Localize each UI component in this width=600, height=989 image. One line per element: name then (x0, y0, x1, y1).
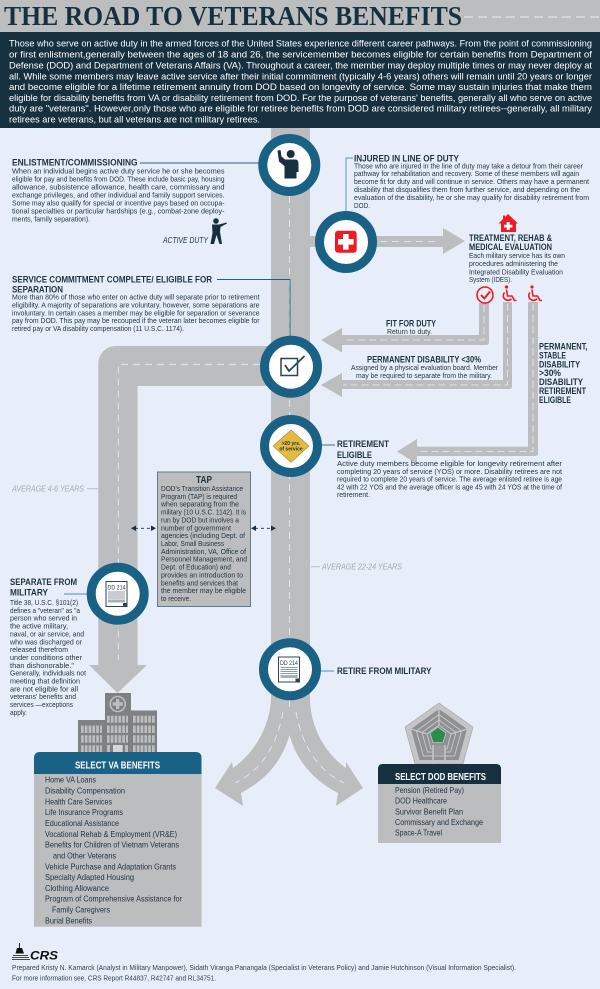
panel: select DOD benefits: Commissary and Exchange (395, 818, 483, 827)
icon: Pentagon building (405, 703, 473, 764)
label: permanent disability under 30 percent: Assigned by a physical evaluation board. Member (351, 363, 498, 372)
text block: treatment and evaluation: procedures administering the (469, 259, 558, 268)
label: permanent stable disability: ELIGIBLE (539, 395, 571, 406)
panel: TAP: Program (TAP) is required (161, 492, 237, 501)
text block: enlistment: tional specialties or particular hardships (e.g., combat-zone deploy- (12, 206, 225, 216)
text block: injured in line of duty: evaluation of the disability, he or she may qualify for disability retirement from (354, 193, 589, 202)
text block: enlistment: Some may also qualify for special or incentive pays based on occupa- (12, 198, 225, 208)
panel: TAP (158, 472, 250, 606)
text block: separate from military: naval, or air service, and (10, 629, 84, 638)
panel: select VA benefits: SELECT VA BENEFITS (75, 760, 160, 772)
panel: select VA benefits: Benefits for Children of Vietnam Veterans (45, 841, 179, 850)
panel: TAP: agencies (including Dept. of (161, 531, 246, 540)
text block: injured in line of duty: Those who are injured in the line of duty may take a detour from their career (354, 162, 583, 170)
text block: service commitment: eligibility. A majority of separations are voluntary, however, some separations are (12, 300, 260, 309)
panel: select VA benefits: Program of Comprehensive Assistance for (45, 895, 182, 904)
text block: treatment and evaluation: TREATMENT, REHAB & (469, 233, 552, 244)
footer credits (12, 963, 516, 983)
label: permanent stable disability (539, 342, 588, 406)
text block: enlistment (12, 158, 225, 224)
label: retire from military: RETIRE FROM MILITARY (337, 666, 432, 677)
panel: TAP: Administration, VA, Office of (161, 547, 247, 556)
icon: capitol dome (12, 943, 30, 960)
milestone: injury cross icon (320, 216, 372, 268)
text block: injured in line of duty: pathway for rehabilitation and recovery. Some of these members will again (354, 169, 579, 178)
text block: separate from military: SEPARATE FROM (10, 577, 77, 588)
panel: TAP: the member may be eligible (161, 586, 246, 595)
label: permanent disability under 30 percent (351, 355, 498, 380)
title: THE ROAD TO VETERANS BENEFITS (4, 1, 462, 31)
text block: injured in line of duty: DOD. (354, 201, 370, 210)
text block: enlistment: ENLISTMENT/COMMISSIONING (12, 158, 138, 169)
icon: yellow road sign: >20 yrs. (282, 441, 301, 447)
panel: select VA benefits: Burial Benefits (45, 916, 92, 925)
panel: TAP: Dept. of Education) and (161, 563, 231, 572)
intro text panel: eligible for disability benefits from VA or disability retirement from DOD. For the purpose of veterans' benefits, generally all who serve on active (9, 93, 592, 104)
text block: enlistment: When an individual begins active duty service he or she becomes (12, 166, 225, 176)
text block: enlistment: ments, family separation). (12, 214, 90, 224)
label: permanent disability under 30 percent: PERMANENT DISABILITY <30% (367, 355, 481, 366)
panel: select DOD benefits: Space-A Travel (395, 829, 442, 838)
panel: select VA benefits: Health Care Services (45, 797, 112, 806)
icon: checkbox (281, 356, 304, 376)
icon: wheelchair (503, 285, 516, 300)
panel: select DOD benefits (378, 764, 501, 843)
panel: select VA benefits: Specialty Adapted Housing (45, 873, 134, 882)
panel: TAP: when separating from the (160, 500, 239, 509)
text block: treatment and evaluation: System (IDES). (469, 275, 512, 284)
connector lines (64, 158, 353, 671)
text block: service commitment: SERVICE COMMITMENT COMPLETE/ ELIGIBLE FOR (12, 275, 212, 286)
panel: TAP: TAP (196, 475, 212, 486)
icon: DD 214 form: DD 214 (108, 584, 126, 592)
panel: select VA benefits: Vocational Rehab & Employment (VR&E) (45, 830, 177, 839)
panel: select VA benefits: Disability Compensation (45, 786, 125, 796)
label: permanent disability under 30 percent: may be required to separate from the military. (356, 371, 492, 380)
intro text panel: retirees are veterans, but all veterans are not military retirees. (9, 114, 260, 125)
text block: enlistment: exchange privileges, and other individual and family support services. (12, 190, 224, 200)
panel: TAP: military (10 U.S.C. 1142). It is (161, 508, 246, 517)
milestone: separate DD214 (91, 567, 144, 620)
panel: select VA benefits: Home VA Loans (45, 776, 96, 785)
icon: soldier (210, 218, 227, 244)
text block: retirement eligible: RETIREMENT (337, 439, 389, 450)
icon: wheelchair (529, 285, 542, 300)
text block: injured in line of duty (354, 154, 589, 210)
text block: separate from military: released therefrom (10, 645, 68, 654)
text block: retirement eligible: required to complete 20 years of service. The average enlisted retiree is age (337, 474, 562, 484)
text block: retirement eligible (337, 439, 563, 499)
text block: separate from military: services —exceptions (10, 700, 73, 709)
text block: separate from military: defines a "veteran" as "a (10, 606, 81, 615)
text block: treatment and evaluation: MEDICAL EVALUATION (469, 242, 552, 253)
text block: service commitment: More than 80% of those who enter on active duty will separate prior to retirement (12, 292, 260, 302)
text block: treatment and evaluation (469, 233, 565, 284)
icon: red hospital house (498, 214, 518, 232)
label: permanent stable disability: DISABILITY (539, 359, 580, 370)
panel: select VA benefits (34, 752, 202, 927)
text block: service commitment: pay from DOD. This pay may be recouped if the veteran later becomes eligible for (12, 316, 260, 325)
milestone: active duty salute icon (263, 138, 316, 192)
label: permanent stable disability: STABLE (539, 350, 566, 362)
label: permanent stable disability: RETIREMENT (539, 386, 586, 397)
label: fit for duty: Return to duty. (387, 327, 432, 336)
intro text panel: duty are "veterans". However,only those who are eligible for retiree benefits from DOD are considered military retirees--generally, all military (9, 104, 592, 115)
text block: enlistment: allowance, subsistence allowance, health care, commissary and (12, 182, 224, 192)
active duty label with soldier (162, 218, 227, 245)
label: fit for duty (386, 319, 436, 336)
text block: injured in line of duty: disability that disqualifies them from further service, and depending on the (354, 185, 580, 194)
panel: TAP: number of government (161, 523, 231, 532)
text block: separate from military (9, 577, 86, 717)
text block: retirement eligible: retirement. (337, 490, 370, 499)
text block: separate from military: Title 38, U.S.C. §101(2) (10, 598, 78, 607)
panel: select VA benefits: and Other Veterans (53, 851, 116, 860)
text block: separate from military: the active military, (10, 622, 68, 631)
intro text panel: or first enlistment,generally between the ages of 18 and 26, the servicemember becomes eligible for certain benefits from Department of (9, 50, 592, 60)
footer credits: For more information see, CRS Report R44837, R42747 and RL34751. (12, 974, 216, 983)
CRS logo: CRS (30, 950, 58, 962)
label: average 22-24 years: AVERAGE 22-24 YEARS (321, 563, 403, 572)
text block: service commitment: involuntary. In certain cases a member may be eligible for separation or severance (12, 308, 260, 317)
text block: separate from military: under conditions other (10, 653, 83, 662)
label: fit for duty: FIT FOR DUTY (386, 319, 436, 330)
DOD panel header (378, 764, 501, 784)
main road with fork (215, 128, 363, 806)
panel: TAP: benefits and services that (161, 578, 238, 587)
panel: TAP: Labor, Small Business (161, 539, 224, 548)
text block: retirement eligible: completing 20 years of service (YOS) or more. Disability retirees are not (337, 467, 562, 476)
text block: treatment and evaluation: Integrated Disability Evaluation (469, 268, 563, 276)
panel: TAP: DOD's Transition Assistance (161, 484, 243, 493)
panel: TAP: provides an introduction to (161, 570, 243, 579)
text block: enlistment: eligible for pay and benefits from DOD. These include basic pay, housing (12, 174, 224, 184)
icon: yellow road sign (273, 430, 309, 462)
panel: select DOD benefits: Survivor Benefit Plan (395, 807, 463, 816)
panel: select VA benefits: Family Caregivers (52, 906, 110, 914)
arrow: injury detour to treatment (310, 228, 465, 254)
icon: yellow road sign: of service (279, 447, 303, 453)
panel: TAP: Personnel Management, and (161, 555, 247, 564)
arrow: permanent stable disability to retirement (397, 302, 538, 464)
text block: separate from military: apply. (10, 708, 27, 717)
text block: service commitment: SEPARATION (12, 285, 63, 296)
milestone: retire DD214 (264, 643, 316, 696)
panel: select VA benefits: Clothing Allowance (45, 884, 110, 893)
text block: retirement eligible: Active duty members become eligible for longevity retirement after (337, 459, 563, 468)
text block: separate from military: meeting that definition (10, 676, 80, 686)
intro text panel: all. While some members may leave active service after their initial commitment (typically 4-6 years) others will remain until 20 years or longer (9, 71, 593, 82)
icon: saluting person (278, 150, 298, 178)
text block: separate from military: Generally, individuals not (10, 669, 86, 678)
label: permanent stable disability: PERMANENT, (539, 342, 588, 352)
text block: retirement eligible: ELIGIBLE (337, 450, 372, 461)
arrow: permanent disability under 30 percent (321, 302, 512, 397)
intro text panel: Defense (DOD) and Department of Veterans Affairs (VA). Throughout a career, the member may deploy multiple times or may never deploy at (9, 60, 592, 72)
intro text panel (0, 32, 600, 128)
VA panel header (34, 752, 202, 774)
text block: separate from military: are not eligible for all (10, 684, 78, 693)
label: permanent stable disability: >30% (539, 368, 561, 379)
arrow: TAP to left road (131, 526, 156, 531)
text block: service commitment: retired pay or VA disability compensation (11 U.S.C. 1174). (12, 324, 184, 333)
arrow: fit for duty (321, 303, 489, 352)
active duty label with soldier: ACTIVE DUTY (162, 236, 209, 245)
milestone: service commitment checkbox (264, 340, 318, 393)
text block: separate from military: person who served in (10, 614, 77, 623)
panel: select DOD benefits: Pension (Retired Pay) (395, 786, 464, 795)
panel: select DOD benefits: DOD Healthcare (395, 797, 447, 806)
footer credits: Prepared Kristy N. Kamarck (Analyst in Military Manpower), Sidath Viranga Panangala (Specialist in Veterans Policy) and Jamie Hutchinson (Visual Information Specialist). (12, 963, 516, 972)
text block: separate from military: MILITARY (10, 588, 49, 599)
intro text panel: and become eligible for a lifetime retirement annuity from DOD based on longevity of service. Some may sustain injuries that make them (9, 82, 592, 93)
icon: fit for duty check (477, 287, 493, 303)
text block: injured in line of duty: INJURED IN LINE OF DUTY (354, 154, 460, 165)
text block: separate from military: who was discharged or (9, 637, 83, 646)
panel: select VA benefits: Vehicle Purchase and Adaptation Grants (45, 862, 176, 871)
label: permanent stable disability: DISABILITY (539, 377, 583, 388)
panel: select VA benefits: Life Insurance Programs (45, 808, 123, 817)
milestone: retirement sign (264, 420, 318, 472)
label: average 4-6 years: AVERAGE 4-6 YEARS (11, 485, 85, 494)
text block: service commitment (12, 275, 260, 333)
panel: TAP: run by DOD but involves a (161, 516, 240, 524)
icon: VA hospital building (78, 693, 157, 752)
icon: DD 214 form: DD 214 (280, 660, 298, 667)
text block: separate from military: than dishonorable." (10, 661, 74, 670)
CRS logo (12, 943, 58, 962)
header band with title (0, 0, 600, 32)
panel: TAP: to receive. (161, 594, 191, 603)
panel: select DOD benefits: SELECT DOD BENEFITS (395, 772, 486, 783)
text block: separate from military: veterans' benefits and (10, 692, 76, 701)
icon: medical cross (335, 231, 357, 253)
text block: retirement eligible: 42 with 22 YOS and the average officer is age 45 with 24 YOS at the time of (337, 482, 563, 492)
separation road to VA benefits (89, 346, 272, 693)
arrow: TAP to main road (251, 526, 276, 531)
panel: select VA benefits: Educational Assistance (45, 819, 119, 828)
text block: treatment and evaluation: Each military service has its own (469, 251, 565, 260)
